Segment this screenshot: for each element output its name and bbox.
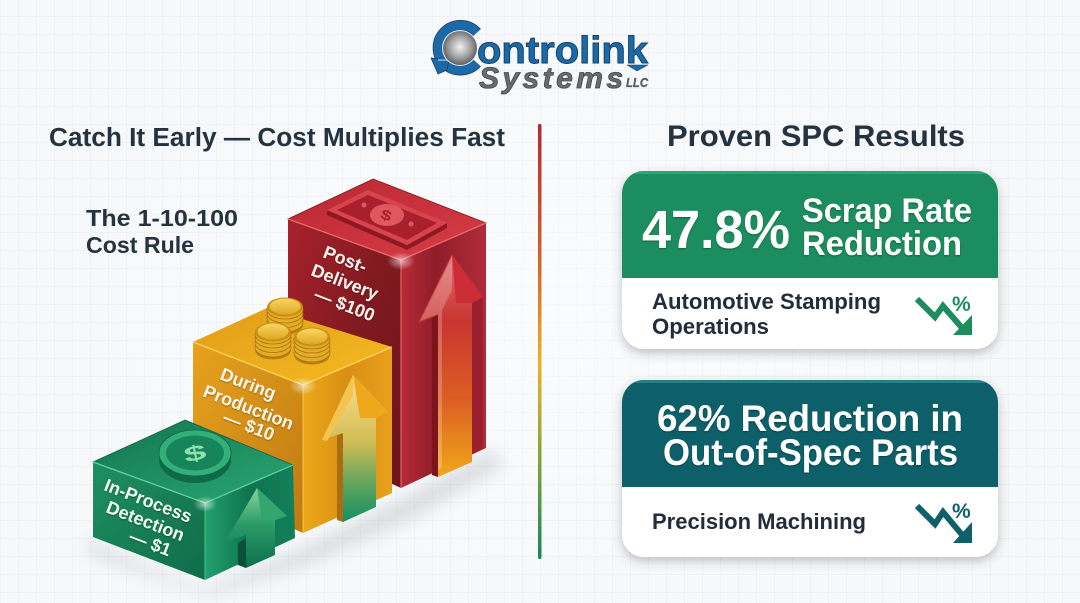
stat label: scrap rate reduction: Scrap Rate [802,192,972,230]
label: in-process detection: — $1 [127,526,174,560]
label: in-process detection: Detection [104,497,187,545]
text: automotive stamping operations [652,289,881,339]
arrow: red up arrow [418,255,483,477]
label: in-process detection [102,475,195,560]
staircase chart: 1-10-100 blocks [85,171,998,596]
icon: teal downward trend: % [952,500,971,523]
arrow: yellow up arrow [322,375,388,522]
stat: 62% reduction in out-of-spec parts: Out-of-Spec Parts [663,432,958,473]
logo wordmark: ontrolink: ontrolink [477,30,649,72]
block: red post-delivery [288,179,486,488]
label: post-delivery [309,242,381,325]
stat label: scrap rate reduction [802,192,972,263]
logo wordmark: Systems: Systems [479,62,623,95]
icon: green downward trend: % [952,293,971,316]
text: automotive stamping operations: Operations [652,314,769,339]
icon: banknote [327,190,447,250]
card: scrap rate [622,171,998,349]
label: in-process detection: In-Process [102,475,195,527]
label: during production: During [218,364,279,404]
logo suffix: LLC: LLC [626,76,649,90]
icon: logo chevron under k [627,65,648,71]
icon: banknote: $ [378,206,394,225]
icon: green coin [159,430,231,483]
stat: 62% reduction in out-of-spec parts: 62% Reduction in [657,398,963,439]
text: the 1-10-100 cost rule: Cost Rule [86,232,194,258]
stat: 47.8%: 47.8% [642,200,790,260]
divider [538,124,542,559]
heading: SPC results: Proven SPC Results [667,120,965,153]
text: precision machining: Precision Machining [652,509,866,534]
label: during production: — $10 [221,407,277,445]
logo: Controlink Systems LLC [431,25,649,95]
stat: 62% reduction in out-of-spec parts [657,398,963,473]
label: during production: Production [201,381,296,434]
text: the 1-10-100 cost rule [86,205,238,258]
arrow: green up arrow [225,488,287,568]
stat label: scrap rate reduction: Reduction [802,225,962,263]
card header: green [622,171,998,278]
label: post-delivery: — $100 [312,284,378,325]
icon: green downward trend [917,293,972,335]
icon: green coin: $ [182,439,209,467]
text: the 1-10-100 cost rule: The 1-10-100 [86,205,238,231]
card: out-of-spec parts [622,380,998,557]
block: green in-process detection [93,420,295,580]
icon: gold coin stacks [255,298,330,364]
text: automotive stamping operations: Automotive Stamping [652,289,881,314]
card header: teal [622,380,998,487]
label: post-delivery: Delivery [309,260,381,304]
block shadow [85,450,505,596]
label: post-delivery: Post- [321,242,370,277]
label: during production [201,364,296,445]
icon: logo ring and sphere [431,25,478,74]
block: yellow during production [193,298,392,533]
icon: teal downward trend [917,500,972,543]
heading: cost rule: Catch It Early — Cost Multiplies Fast [49,124,506,152]
